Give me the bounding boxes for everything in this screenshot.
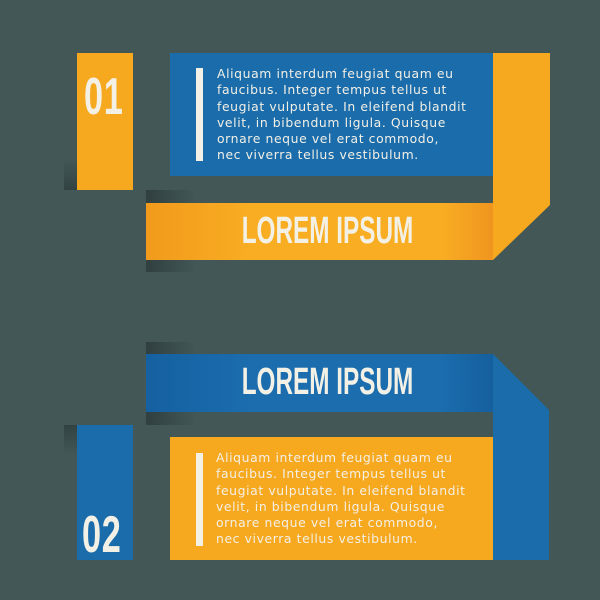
- accent bar: [196, 453, 203, 546]
- orange number tab: [77, 53, 133, 190]
- blue fold strip: [493, 354, 549, 560]
- body text: ornare neque vel erat commodo,: [216, 515, 438, 530]
- body text: Aliquam interdum feugiat quam eu: [217, 66, 454, 81]
- orange fold strip: [493, 53, 550, 260]
- shadow: tab: [64, 160, 77, 190]
- number 02: 02: [82, 506, 121, 564]
- body text: faucibus. Integer tempus tellus ut: [217, 82, 447, 97]
- shadow: banner top: [146, 190, 196, 203]
- blue number tab: [77, 425, 133, 560]
- body text: velit, in bibendum ligula. Quisque: [216, 499, 445, 514]
- accent bar: [196, 68, 203, 161]
- body text: velit, in bibendum ligula. Quisque: [217, 115, 446, 130]
- blue text box: [170, 53, 493, 176]
- number 01: 01: [84, 68, 123, 126]
- blue banner: [146, 354, 493, 412]
- body text: ornare neque vel erat commodo,: [217, 131, 439, 146]
- panel: section 2: [64, 342, 549, 564]
- banner heading: LOREM IPSUM: [242, 210, 413, 252]
- body text: faucibus. Integer tempus tellus ut: [216, 466, 446, 481]
- body text: [216, 450, 466, 546]
- shadow: tab: [64, 425, 77, 455]
- body text: nec viverra tellus vestibulum.: [216, 531, 418, 546]
- orange banner: [146, 203, 493, 260]
- body text: Aliquam interdum feugiat quam eu: [216, 450, 453, 465]
- panel: section 1: [64, 53, 550, 272]
- body text: feugiat vulputate. In eleifend blandit: [216, 483, 466, 498]
- shadow: banner bottom: [146, 260, 196, 272]
- orange text box: [170, 437, 493, 560]
- banner heading: LOREM IPSUM: [242, 361, 413, 403]
- body text: [217, 66, 467, 162]
- shadow: banner bottom: [146, 412, 196, 425]
- body text: feugiat vulputate. In eleifend blandit: [217, 99, 467, 114]
- shadow: banner top: [146, 342, 196, 354]
- body text: nec viverra tellus vestibulum.: [217, 147, 419, 162]
